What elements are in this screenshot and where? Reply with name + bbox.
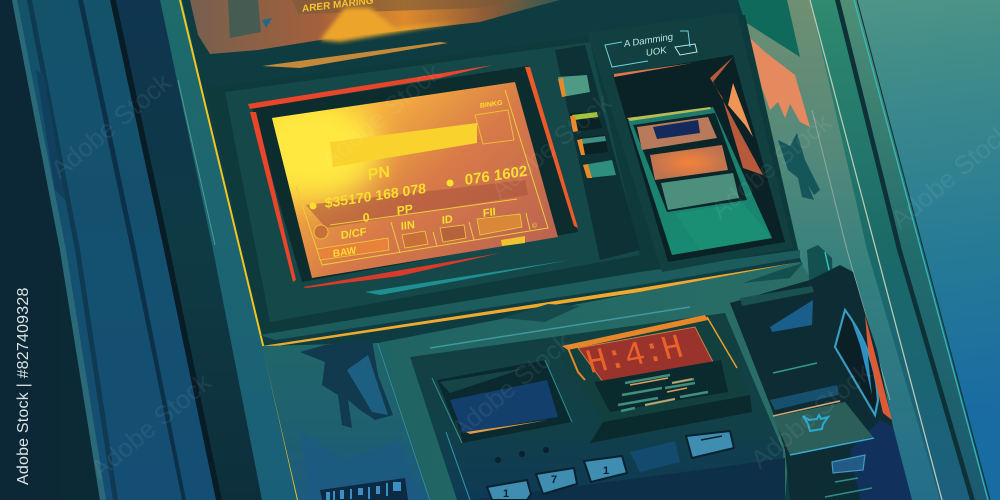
watermark: Adobe Stock [45, 66, 178, 185]
keypad keys: 1 [603, 465, 609, 477]
label panel: A Damming Lok: UOK [646, 45, 667, 59]
ATM screen: © [532, 221, 538, 230]
receipt tray [773, 401, 874, 455]
sign highlight line [262, 42, 448, 68]
cabinet body [182, 0, 940, 500]
stock id text: Adobe Stock | #827409328 [15, 287, 32, 485]
watermark: Adobe Stock [315, 56, 448, 175]
ATM screen: 076 1602 [464, 163, 528, 189]
ATM screen: PP [396, 202, 413, 218]
LED clock display unit: H:4:H [582, 330, 687, 384]
console blue window [432, 360, 572, 443]
ATM screen: ID [442, 213, 453, 227]
label panel: A Damming Lok [587, 12, 793, 272]
ATM screen: PN [367, 163, 390, 184]
ATM screen: BINKG [480, 100, 503, 110]
watermark: Adobe Stock [485, 86, 618, 205]
ATM screen: BAW [333, 245, 357, 260]
LED clock display unit [557, 315, 752, 443]
base vent [825, 455, 872, 497]
ATM screen: 0 [362, 210, 370, 225]
keypad keys: 7 [551, 474, 557, 486]
right cabinet strips [810, 0, 990, 500]
ATM screen: $35170 168 078 [324, 180, 426, 211]
red screen frame [248, 65, 578, 295]
main upper panel [206, 15, 800, 340]
watermark: Adobe Stock [705, 106, 838, 225]
ATM screen [250, 82, 558, 278]
ATM screen: IIN [401, 219, 415, 233]
watermark: Adobe Stock [85, 366, 218, 485]
top sign [190, 0, 560, 54]
ATM screen: FII [483, 206, 496, 220]
ATM screen: D/CF [341, 226, 367, 242]
side buttons [555, 45, 640, 260]
console top surface [378, 245, 833, 500]
keypad keys: 1 [503, 488, 509, 500]
side panel with orange reflection [738, 0, 942, 500]
label panel: A Damming Lok: A Damming [624, 32, 673, 50]
keypad keys [487, 431, 734, 500]
slot and card reader recess [613, 55, 785, 262]
yellow trim line [180, 0, 298, 500]
upper panel lower yellow edge [262, 262, 800, 347]
left pillar [0, 0, 300, 500]
watermark: Adobe Stock [445, 326, 578, 445]
lower left panel [262, 340, 430, 500]
lower console [410, 307, 785, 500]
watermark: Adobe Stock [745, 356, 878, 475]
right device block and handle [730, 265, 912, 500]
QR code [320, 478, 408, 500]
